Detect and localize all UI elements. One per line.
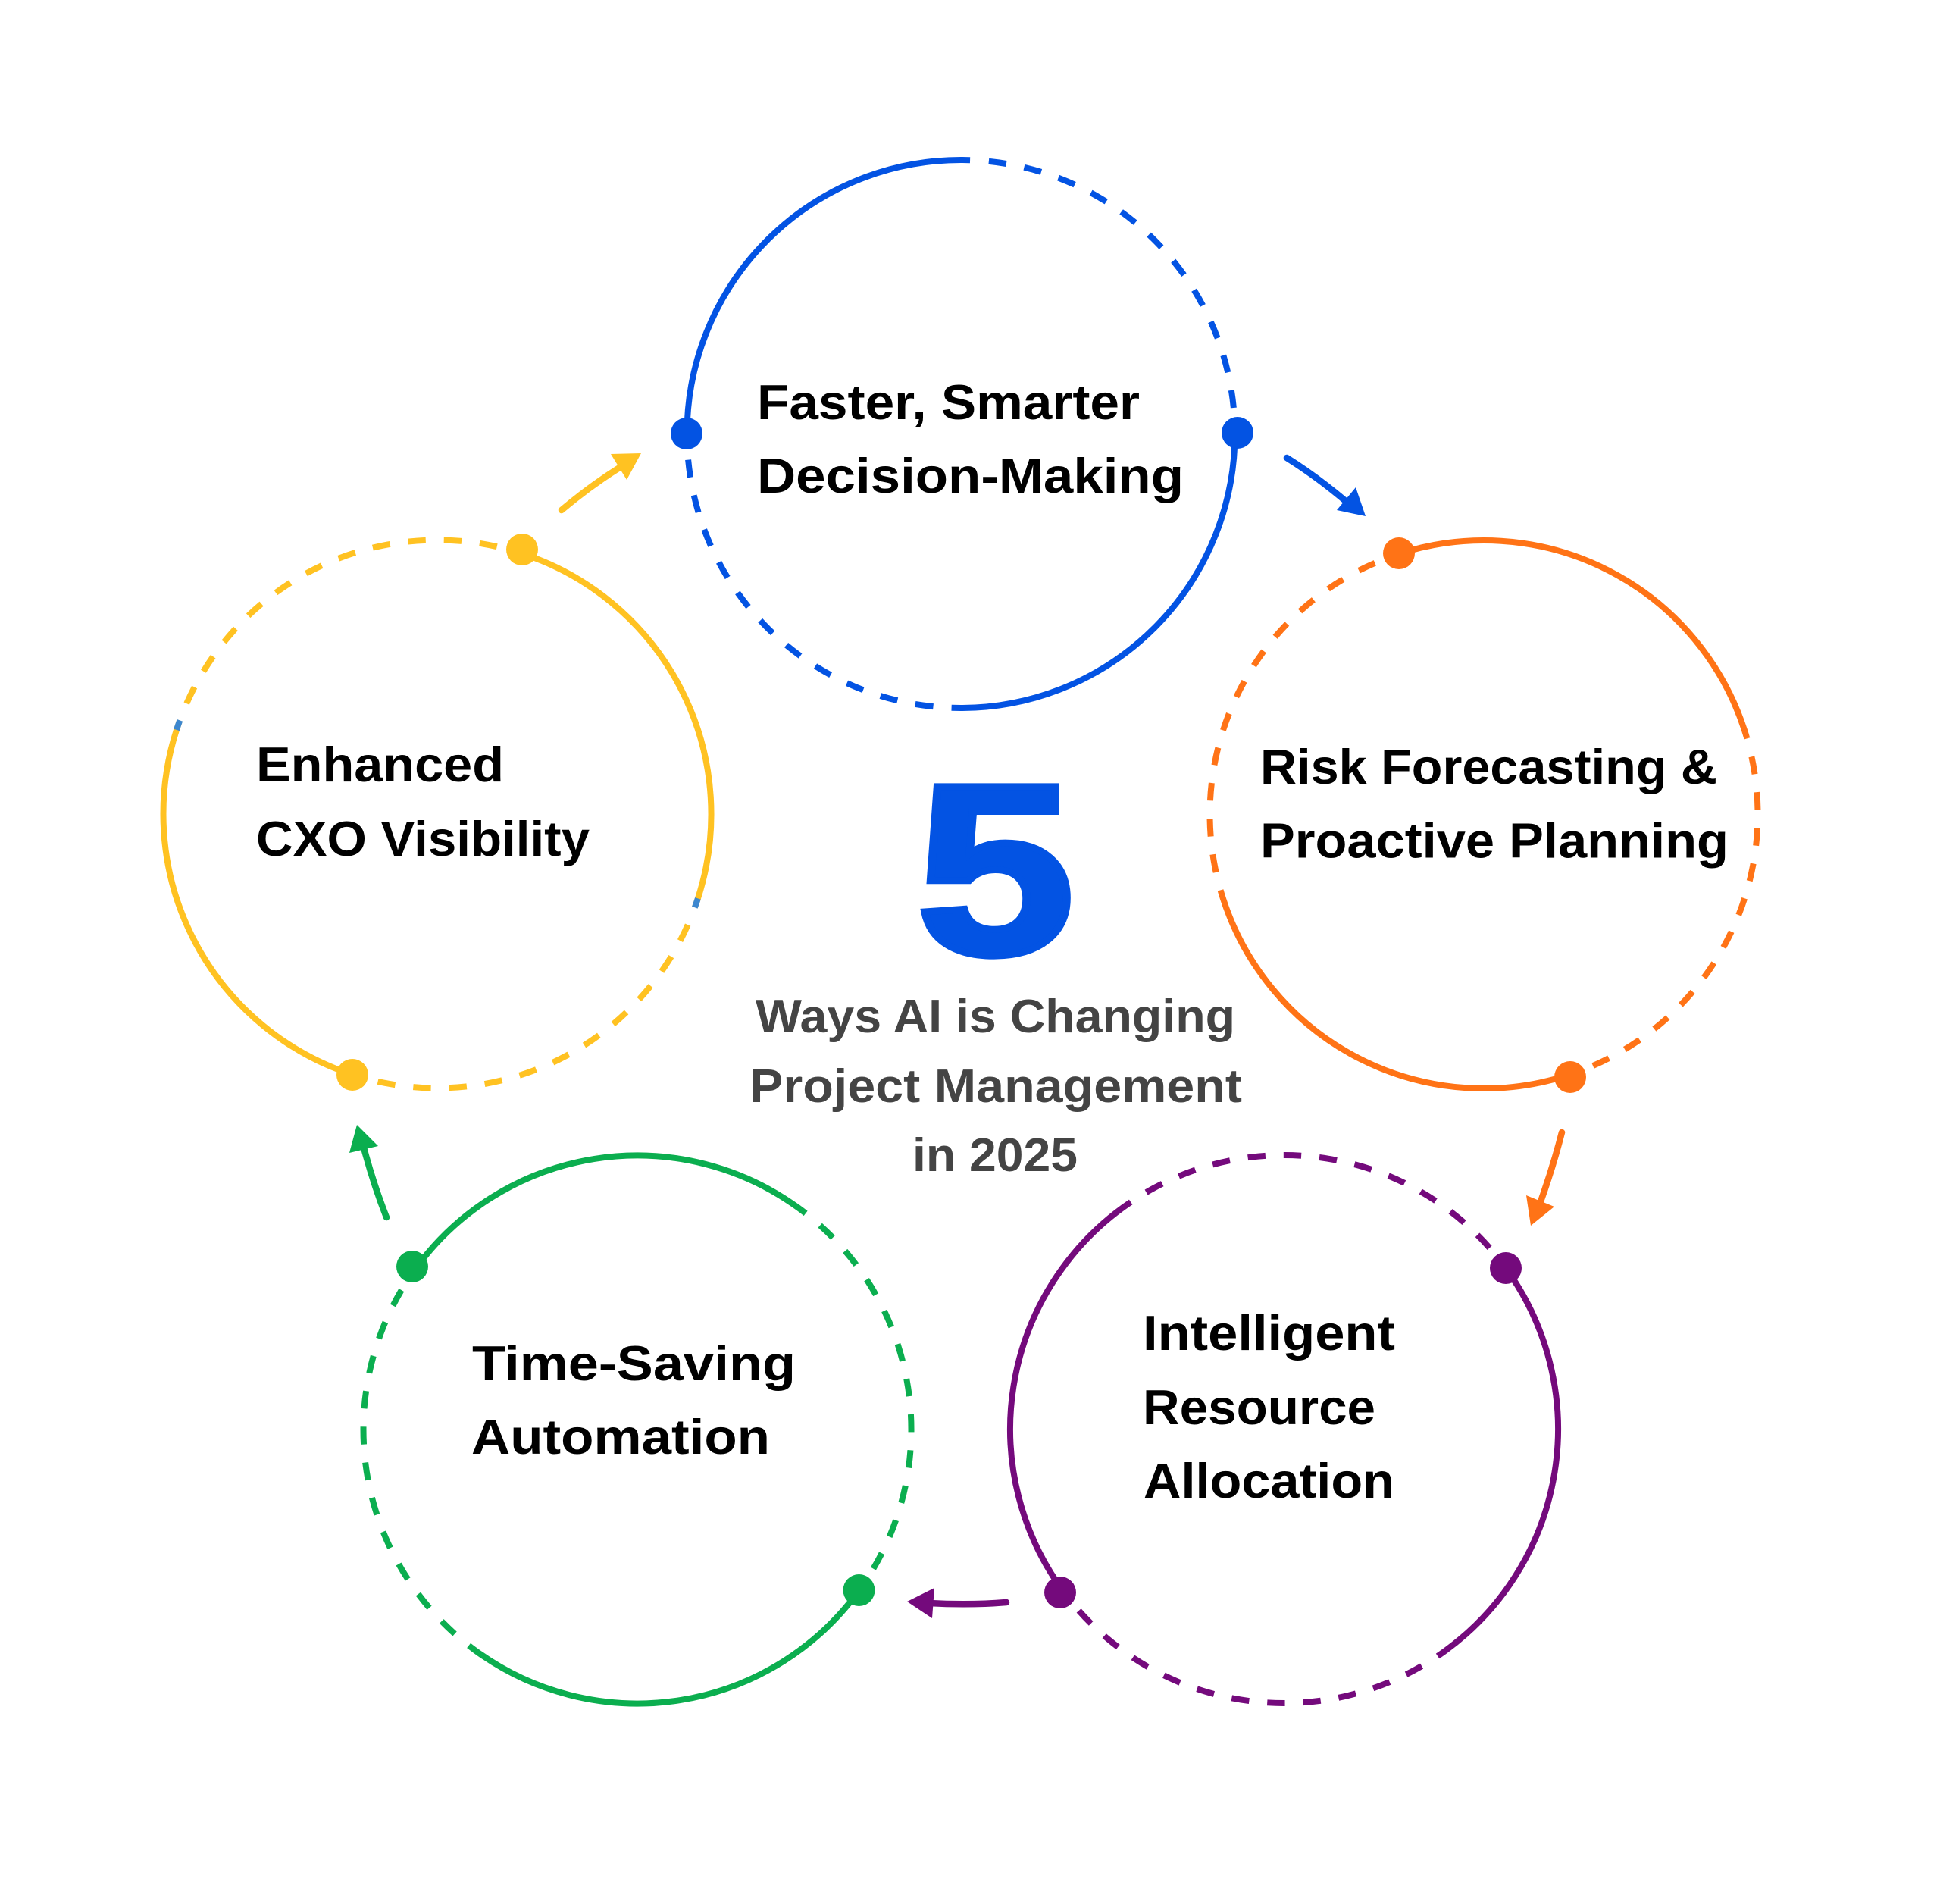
- arrow: yellow to blue: [562, 453, 641, 510]
- panel: Intelligent Resource Allocation circle: Intelligent: [1143, 1305, 1395, 1361]
- panel: Intelligent Resource Allocation circle: [902, 1047, 1666, 1812]
- heading: subtitle: Project Management: [749, 1060, 1242, 1113]
- arrow: purple to green: [907, 1588, 1006, 1618]
- panel: Risk Forecasting & Proactive Planning circle: [1138, 469, 1829, 1160]
- panel: Faster, Smarter Decision-Making circle: Faster, Smarter: [757, 374, 1140, 430]
- panel: Risk Forecasting & Proactive Planning circle: Proactive Planning: [1260, 813, 1729, 869]
- panel: Risk Forecasting & Proactive Planning circle: Risk Forecasting &: [1260, 739, 1717, 794]
- arrow: orange to purple: [1526, 1132, 1562, 1226]
- panel: Time-Saving Automation circle: Time-Saving: [472, 1336, 796, 1391]
- panel: Faster, Smarter Decision-Making circle: [660, 133, 1262, 734]
- heading: subtitle: [749, 991, 1242, 1182]
- heading: subtitle: Ways AI is Changing: [756, 991, 1235, 1043]
- arrow: blue to orange: [1287, 458, 1366, 516]
- panel: Time-Saving Automation circle: Automation: [471, 1409, 770, 1464]
- title: big number 5: 5: [916, 734, 1075, 1005]
- panel: Time-Saving Automation circle: [251, 1043, 1024, 1816]
- panel: Intelligent Resource Allocation circle: Resource: [1143, 1379, 1375, 1435]
- arrow: green to yellow: [349, 1125, 386, 1217]
- panel: Faster, Smarter Decision-Making circle: Decision-Making: [757, 448, 1184, 503]
- panel: Enhanced CXO Visibility circle: Enhanced: [256, 737, 504, 792]
- panel: Enhanced CXO Visibility circle: [76, 453, 799, 1176]
- heading: subtitle: in 2025: [912, 1129, 1078, 1182]
- panel: Enhanced CXO Visibility circle: CXO Visibility: [256, 811, 590, 866]
- panel: Intelligent Resource Allocation circle: Allocation: [1144, 1453, 1394, 1508]
